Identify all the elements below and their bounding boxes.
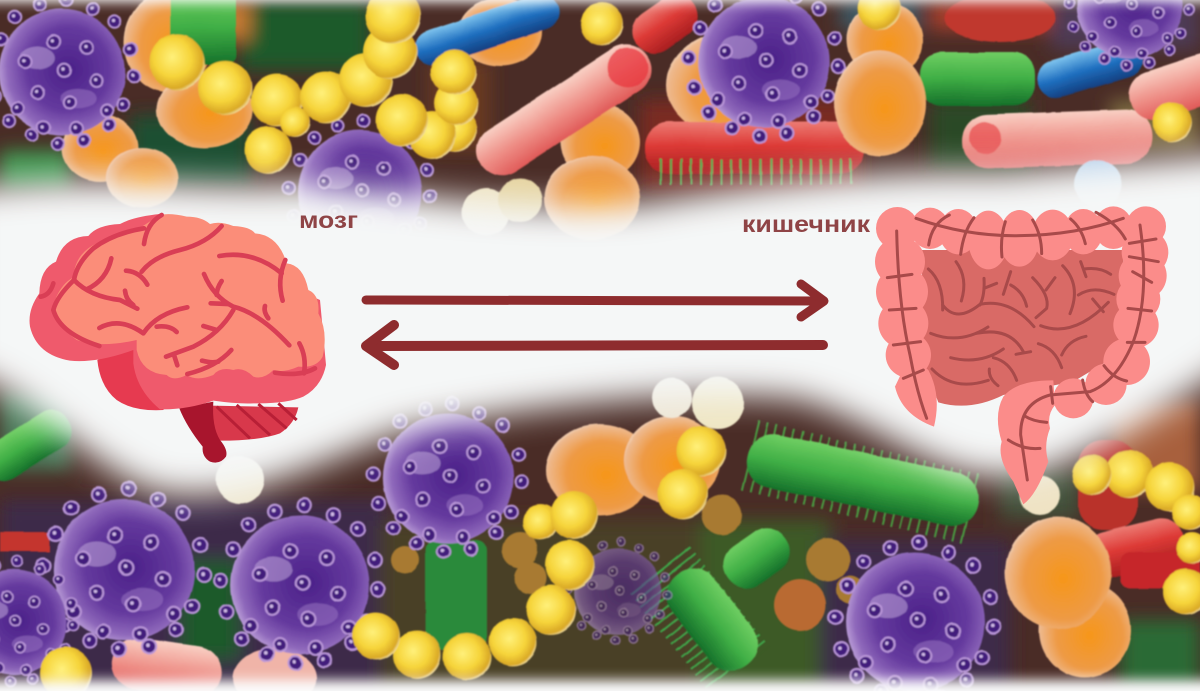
microbes: top band (0, 0, 1200, 268)
arrow: intestine to brain (366, 325, 823, 365)
green bacteria bottom (0, 403, 983, 681)
central white fade band (0, 152, 1200, 495)
microbes: bottom band (0, 377, 1200, 691)
red and pink rods top (467, 0, 1200, 185)
orange cells top (62, 0, 923, 240)
top underlayer patches (0, 0, 1200, 190)
label: intestine: кишечник (742, 211, 871, 237)
icon: brain (30, 214, 326, 463)
red and pink rods bottom (0, 440, 1200, 691)
pale faded cells under the white band (216, 377, 1060, 515)
arrow: brain to intestine (366, 284, 824, 317)
yellow cocci chain bottom (40, 426, 1200, 691)
yellow cocci chain top (149, 0, 1192, 174)
intestine lines (887, 212, 1158, 480)
lower brain shading (97, 343, 187, 410)
virus particles bottom (0, 397, 1000, 691)
small dim orange cocci bottom (391, 495, 864, 631)
green and blue rods top (170, 0, 1147, 172)
salmon lobes (55, 214, 325, 378)
large intestine lobes (875, 206, 1168, 504)
orange cells bottom (546, 416, 720, 516)
large orange cell top (834, 50, 926, 156)
cerebellum stripes (217, 403, 297, 438)
cerebellum (180, 405, 298, 441)
icon: intestines (875, 206, 1168, 504)
small intestine background (922, 250, 1123, 406)
brain fold lines (41, 215, 315, 374)
virus particles top (0, 0, 1195, 268)
label: brain: мозг (299, 207, 358, 233)
outer lobe band (30, 214, 326, 409)
brain stem (179, 402, 227, 463)
pale faded cells near the white band (462, 160, 1122, 236)
bottom underlayer patches (0, 390, 1200, 691)
large orange cells bottom right (1005, 517, 1131, 678)
